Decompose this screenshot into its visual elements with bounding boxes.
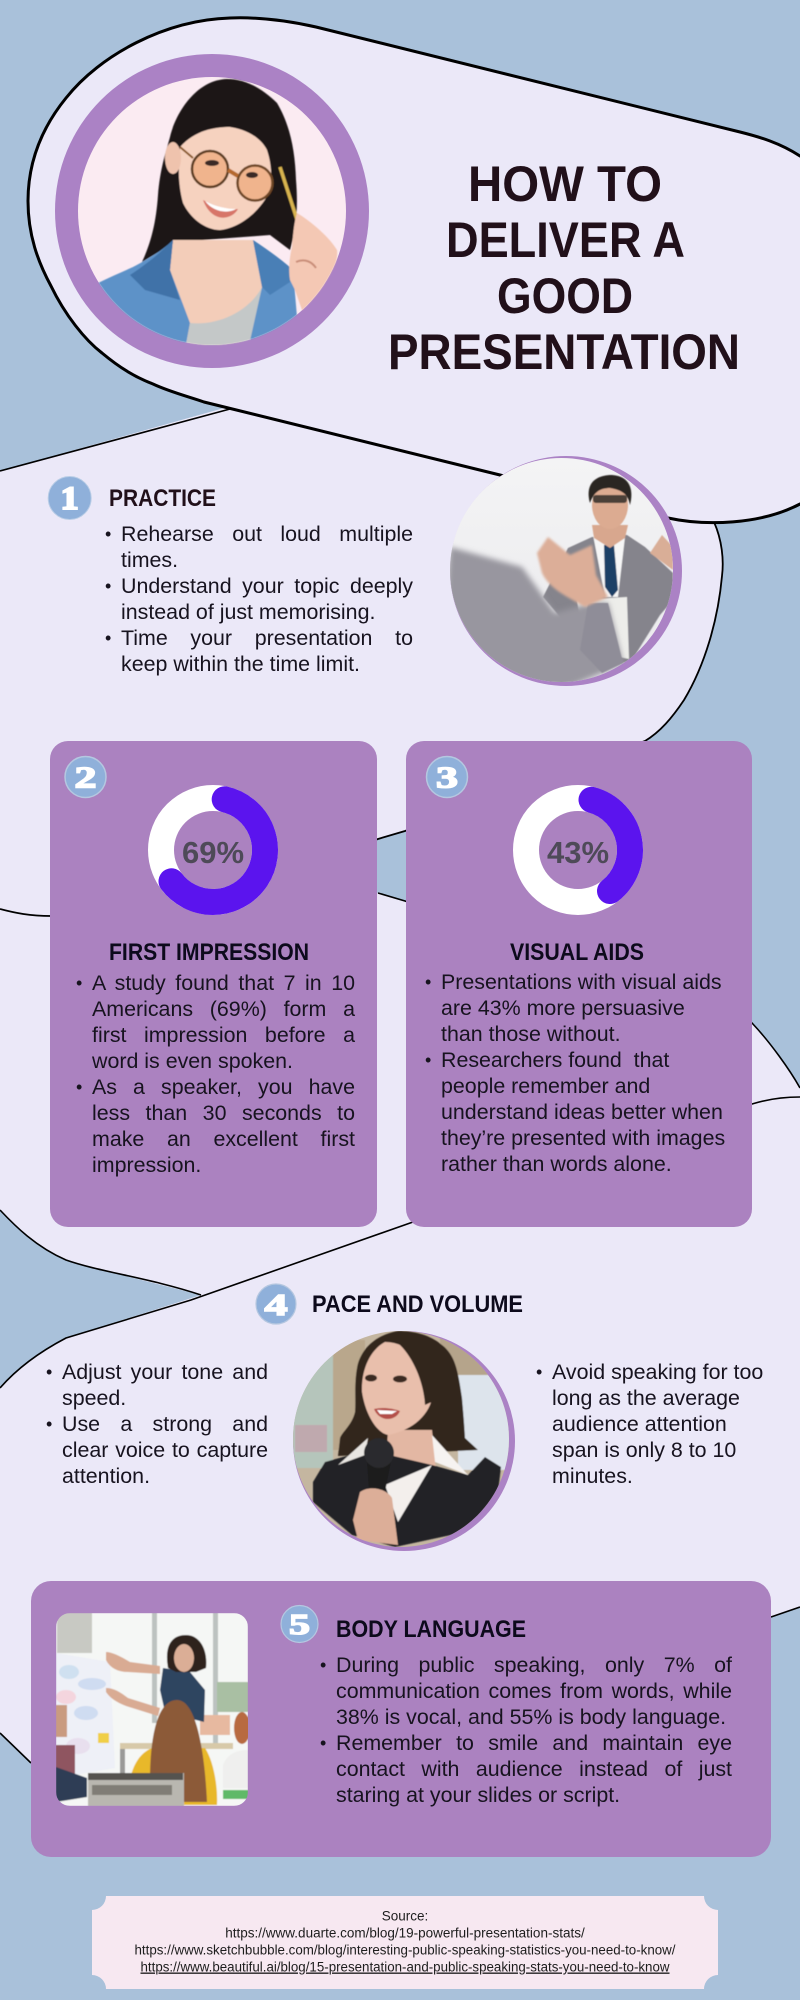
text block: practice bullets: Time your presentation to (121, 626, 413, 650)
text: • (536, 1362, 542, 1382)
title: GOOD (497, 268, 633, 324)
text block: pace and volume left bullets (46, 1360, 268, 1488)
text block: body language bullets: contact with audience instead of just (336, 1757, 732, 1781)
text block: body language bullets: During public speaking, only 7% of (336, 1653, 732, 1677)
text block: body language bullets (320, 1653, 732, 1807)
badge: number 4 (256, 1284, 296, 1324)
title: PRESENTATION (388, 324, 740, 380)
text block: visual aids bullets: people remember and (441, 1074, 650, 1098)
text: • (425, 972, 431, 992)
text block: pace and volume left bullets: Adjust your tone and (62, 1360, 268, 1384)
text block: pace and volume right bullets: minutes. (552, 1464, 633, 1488)
text: • (46, 1362, 52, 1382)
text block: visual aids bullets: they’re presented with images (441, 1126, 725, 1150)
photo: man in grey suit presenting (440, 456, 682, 690)
text block: first impression bullets: make an excellent first (92, 1127, 355, 1151)
source text: https://www.beautiful.ai/blog/15-presentation-and-public-speaking-stats-you-need-to-know (140, 1960, 670, 1974)
text: • (46, 1414, 52, 1434)
text block: visual aids bullets (425, 970, 725, 1176)
heading: body language: BODY LANGUAGE (336, 1616, 526, 1643)
text block: visual aids bullets: Researchers found that (441, 1048, 669, 1072)
badge: number 5: 5 (289, 1609, 310, 1641)
text: • (76, 973, 82, 993)
heading: visual aids: VISUAL AIDS (510, 939, 644, 966)
text block: pace and volume right bullets: Avoid speaking for too (552, 1360, 763, 1384)
source text: https://www.duarte.com/blog/19-powerful-presentation-stats/ (225, 1926, 585, 1940)
text block: first impression bullets: first impression before a (92, 1023, 355, 1047)
text: • (105, 576, 111, 596)
text: • (425, 1050, 431, 1070)
photo: woman speaking into microphone (293, 1331, 515, 1551)
card: visual aids (406, 741, 752, 1227)
card: body language (31, 1581, 771, 1857)
text block: practice bullets (105, 522, 413, 676)
text block: pace and volume right bullets (536, 1360, 763, 1488)
title: DELIVER A (446, 212, 685, 268)
text block: practice bullets: Rehearse out loud multiple (121, 522, 413, 546)
source text: Source: (382, 1908, 428, 1924)
text block: practice bullets: instead of just memorising. (121, 600, 375, 624)
text block: pace and volume right bullets: audience attention (552, 1412, 727, 1436)
background blobs (0, 408, 800, 1763)
text block: first impression bullets: As a speaker, you have (92, 1075, 355, 1099)
source text (134, 1908, 676, 1974)
photo: presenter at flipchart with audience (56, 1613, 250, 1806)
text block: pace and volume left bullets: Use a strong and (62, 1412, 268, 1436)
donut chart: 43%: 43% (547, 835, 609, 870)
text block: pace and volume right bullets: long as the average (552, 1386, 740, 1410)
text block: body language bullets: communication comes from words, while (336, 1679, 732, 1703)
source box shape (92, 1896, 718, 1989)
badge: number 1: 1 (61, 481, 79, 517)
source text: https://www.sketchbubble.com/blog/interesting-public-speaking-statistics-you-need-to-know/ (134, 1942, 676, 1958)
title banner shape (28, 18, 800, 523)
text: • (320, 1655, 326, 1675)
heading: practice: PRACTICE (109, 485, 216, 512)
title: HOW TO (468, 156, 662, 212)
text block: first impression bullets: A study found that 7 in 10 (92, 971, 355, 995)
text block: first impression bullets: less than 30 seconds to (92, 1101, 355, 1125)
card: first impression (50, 741, 377, 1227)
donut chart: 69% (161, 798, 265, 902)
text block: body language bullets: Remember to smile and maintain eye (336, 1731, 732, 1755)
badge: number 3 (426, 756, 468, 798)
text block: first impression bullets: word is even spoken. (92, 1049, 293, 1073)
text block: visual aids bullets: rather than words alone. (441, 1152, 672, 1176)
badge: number 1 (48, 476, 91, 520)
photo: woman with glasses and pencil (55, 54, 369, 368)
text: • (76, 1077, 82, 1097)
text block: body language bullets: staring at your slides or script. (336, 1783, 620, 1807)
text block: visual aids bullets: than those without. (441, 1022, 621, 1046)
badge: number 2 (65, 756, 106, 798)
text block: visual aids bullets: understand ideas better when (441, 1100, 723, 1124)
badge: number 5 (281, 1606, 318, 1642)
heading: pace and volume: PACE AND VOLUME (312, 1291, 523, 1318)
badge: number 3: 3 (436, 760, 458, 794)
donut chart: 69%: 69% (182, 835, 244, 870)
donut chart: 43% (526, 798, 630, 902)
heading: first impression: FIRST IMPRESSION (109, 939, 309, 966)
text: • (320, 1733, 326, 1753)
text block: pace and volume left bullets: speed. (62, 1386, 126, 1410)
text block: first impression bullets: Americans (69%) form a (92, 997, 355, 1021)
text block: practice bullets: times. (121, 548, 178, 572)
text block: pace and volume left bullets: clear voice to capture (62, 1438, 268, 1462)
badge: number 2: 2 (74, 760, 96, 794)
title (388, 156, 740, 380)
text block: first impression bullets (76, 971, 355, 1177)
text block: practice bullets: Understand your topic deeply (121, 574, 413, 598)
text: • (105, 524, 111, 544)
text block: pace and volume right bullets: span is only 8 to 10 (552, 1438, 736, 1462)
text block: visual aids bullets: are 43% more persuasive (441, 996, 685, 1020)
text block: body language bullets: 38% is vocal, and 55% is body language. (336, 1705, 726, 1729)
text block: visual aids bullets: Presentations with visual aids (441, 970, 722, 994)
text block: practice bullets: keep within the time limit. (121, 652, 360, 676)
text block: pace and volume left bullets: attention. (62, 1464, 150, 1488)
badge: number 4: 4 (264, 1287, 288, 1322)
text block: first impression bullets: impression. (92, 1153, 201, 1177)
text: • (105, 628, 111, 648)
